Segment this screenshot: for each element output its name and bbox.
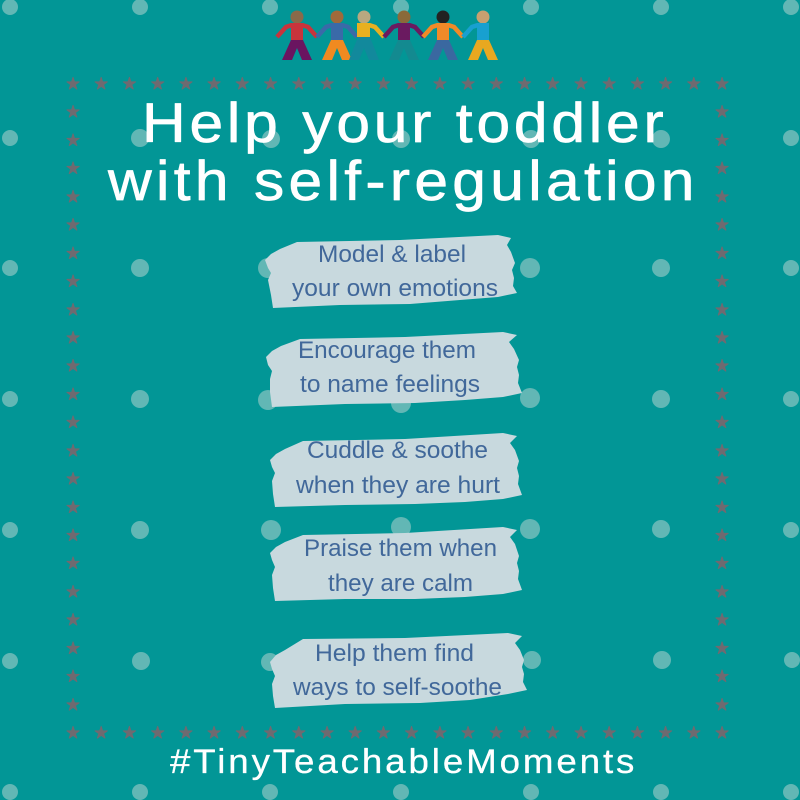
- infographic canvas: ★: [66, 356, 80, 375]
- infographic canvas: ★: [66, 723, 80, 742]
- panel: encourage them: to name feelings: [300, 371, 480, 398]
- infographic canvas: ★: [715, 243, 729, 262]
- infographic canvas: ★: [715, 667, 729, 686]
- infographic canvas: ★: [658, 723, 673, 742]
- infographic canvas: ★: [292, 723, 306, 742]
- infographic canvas: ★: [66, 497, 80, 516]
- infographic canvas: ★: [179, 723, 193, 742]
- infographic canvas: ★: [66, 215, 80, 234]
- panel: model and label: [265, 235, 517, 308]
- infographic canvas: ★: [66, 554, 80, 573]
- infographic canvas: ★: [715, 328, 729, 347]
- infographic canvas: ★: [715, 384, 729, 403]
- infographic canvas: ★: [66, 582, 80, 601]
- infographic canvas: ★: [715, 159, 729, 178]
- infographic canvas: ★: [574, 74, 588, 93]
- infographic canvas: ★: [404, 723, 419, 742]
- infographic canvas: ★: [66, 441, 80, 460]
- panel: cuddle and soothe: Cuddle & soothe: [307, 437, 488, 464]
- infographic canvas: ★: [235, 74, 249, 93]
- infographic canvas: ★: [517, 723, 532, 742]
- infographic canvas: ★: [630, 74, 645, 93]
- infographic canvas: ★: [94, 74, 108, 93]
- panel: cuddle and soothe: [270, 433, 522, 507]
- infographic canvas: ★: [348, 723, 362, 742]
- panel: help them find: [270, 633, 527, 708]
- infographic canvas: ★: [207, 74, 221, 93]
- infographic canvas: ★: [574, 723, 588, 742]
- infographic canvas: ★: [715, 130, 729, 149]
- panel: model and label: Model & label: [318, 241, 466, 268]
- infographic canvas: ★: [687, 723, 701, 742]
- title: Help your toddler: [142, 92, 664, 154]
- panel: help them find: Help them find: [315, 640, 474, 667]
- infographic canvas: ★: [66, 695, 80, 714]
- infographic canvas: ★: [66, 667, 80, 686]
- infographic canvas: ★: [66, 102, 80, 121]
- infographic canvas: ★: [546, 723, 560, 742]
- infographic canvas: ★: [489, 723, 503, 742]
- infographic canvas: ★: [320, 723, 334, 742]
- infographic canvas: ★: [715, 497, 729, 516]
- infographic canvas: ★: [715, 469, 729, 488]
- infographic canvas: ★: [66, 272, 80, 290]
- infographic canvas: ★: [66, 300, 80, 319]
- panel: encourage them: [266, 332, 522, 407]
- infographic canvas: ★: [715, 356, 729, 375]
- infographic canvas: ★: [602, 74, 616, 93]
- infographic canvas: ★: [320, 74, 334, 93]
- infographic canvas: ★: [715, 102, 729, 121]
- infographic canvas: ★: [263, 74, 278, 93]
- infographic canvas: ★: [658, 74, 673, 93]
- infographic canvas: ★: [151, 723, 165, 742]
- infographic canvas: ★: [66, 328, 80, 347]
- infographic canvas: ★: [715, 610, 729, 629]
- panel: cuddle and soothe: when they are hurt: [295, 472, 500, 499]
- infographic canvas: ★: [94, 723, 108, 742]
- infographic canvas: ★: [122, 74, 137, 93]
- infographic canvas: ★: [66, 243, 80, 262]
- panel: praise them: [270, 527, 522, 601]
- icon: row of children holding hands: [277, 10, 498, 60]
- infographic canvas: ★: [715, 272, 729, 290]
- infographic canvas: ★: [404, 74, 419, 93]
- hashtag: #TinyTeachableMoments: [170, 743, 634, 781]
- infographic canvas: ★: [66, 384, 80, 403]
- infographic canvas: ★: [715, 638, 729, 657]
- infographic canvas: ★: [630, 723, 645, 742]
- infographic canvas: ★: [179, 74, 193, 93]
- infographic canvas: ★: [66, 413, 80, 432]
- infographic canvas: ★: [292, 74, 306, 93]
- infographic canvas: ★: [715, 723, 729, 742]
- infographic canvas: ★: [715, 582, 729, 601]
- title: [107, 92, 694, 212]
- infographic canvas: ★: [263, 723, 278, 742]
- infographic canvas: ★: [66, 638, 80, 657]
- infographic canvas: ★: [715, 695, 729, 714]
- infographic canvas: ★: [66, 187, 80, 206]
- infographic canvas: ★: [122, 723, 137, 742]
- infographic canvas: ★: [461, 74, 475, 93]
- infographic canvas: ★: [715, 554, 729, 573]
- infographic canvas: ★: [546, 74, 560, 93]
- infographic canvas: ★: [687, 74, 701, 93]
- infographic canvas: ★: [715, 187, 729, 206]
- infographic canvas: ★: [66, 526, 80, 544]
- infographic canvas: ★: [433, 723, 447, 742]
- panel: help them find: ways to self-soothe: [292, 674, 502, 701]
- infographic canvas: ★: [602, 723, 616, 742]
- panel: model and label: your own emotions: [292, 275, 498, 302]
- infographic canvas: ★: [433, 74, 447, 93]
- infographic canvas: ★: [517, 74, 532, 93]
- panel: encourage them: Encourage them: [298, 337, 476, 364]
- infographic canvas: ★: [66, 74, 80, 93]
- infographic canvas: ★: [348, 74, 362, 93]
- infographic canvas: ★: [66, 469, 80, 488]
- infographic canvas: ★: [66, 130, 80, 149]
- panel: praise them: they are calm: [328, 570, 473, 597]
- infographic canvas: ★: [66, 159, 80, 178]
- infographic canvas: ★: [715, 300, 729, 319]
- infographic canvas: ★: [715, 215, 729, 234]
- infographic canvas: ★: [66, 610, 80, 629]
- infographic canvas: ★: [715, 413, 729, 432]
- infographic canvas: ★: [235, 723, 249, 742]
- infographic canvas: ★: [376, 723, 391, 742]
- infographic canvas: ★: [715, 441, 729, 460]
- infographic canvas: ★: [489, 74, 503, 93]
- infographic canvas: ★: [207, 723, 221, 742]
- infographic canvas: ★: [151, 74, 165, 93]
- title: with self-regulation: [107, 150, 694, 212]
- infographic canvas: ★: [715, 74, 729, 93]
- infographic canvas: ★: [376, 74, 391, 93]
- infographic canvas: ★: [715, 526, 729, 544]
- panel: praise them: Praise them when: [304, 535, 497, 562]
- infographic canvas: ★: [461, 723, 475, 742]
